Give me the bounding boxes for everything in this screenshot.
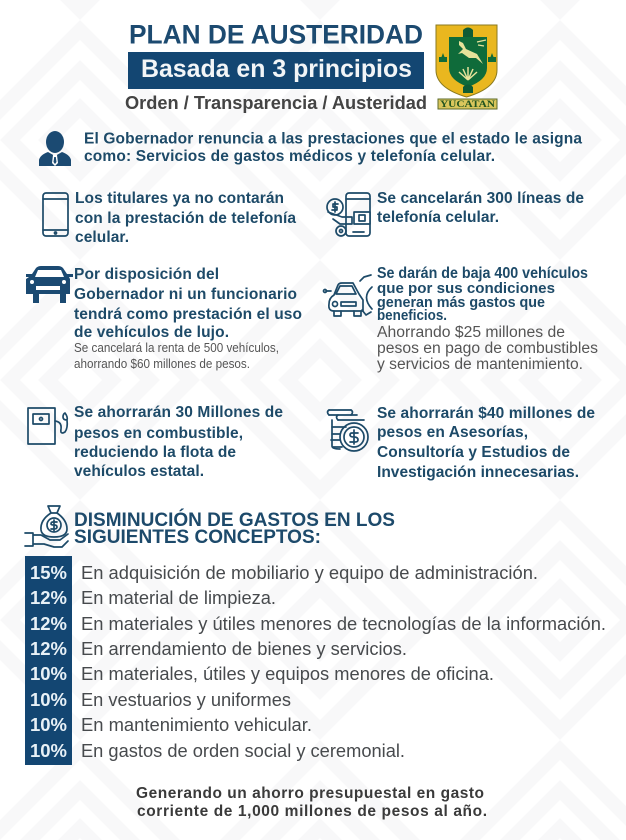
text: fuel savings: pesos en combustible,	[74, 425, 243, 442]
text: fuel savings: reduciendo la flota de	[74, 444, 236, 461]
text: titulares	[75, 190, 296, 246]
text: consultancy savings	[377, 405, 595, 481]
text: savings on fuel and maintenance	[377, 324, 598, 373]
row 4: 12%	[30, 638, 67, 659]
text: 400 vehicles: generan más gastos que	[377, 295, 545, 311]
row 2: En material de limpieza.	[81, 587, 276, 608]
text: rental cancellation	[74, 341, 279, 371]
icon: coins stack	[328, 410, 368, 451]
banner: Basada en 3 principios	[128, 52, 424, 89]
text: 400 vehicles	[377, 265, 598, 373]
row 5: 10%	[30, 663, 67, 684]
text: titulares: celular.	[75, 229, 129, 246]
icon: luxury vehicle	[26, 266, 73, 303]
section heading	[74, 507, 395, 548]
icon: phone with money	[327, 193, 370, 236]
title: PLAN DE AUSTERIDAD	[129, 20, 423, 50]
row 3: 12%	[30, 613, 67, 634]
text: rental cancellation: ahorrando $60 millones de pesos.	[74, 357, 250, 371]
text: governor renounces benefits: como: Servicios de gastos médicos y telefonía celular.	[84, 148, 495, 165]
text: titulares: Los titulares ya no contarán	[75, 190, 284, 207]
row 6: En vestuarios y uniformes	[81, 689, 291, 710]
text: 300 phone lines: Se cancelarán 300 líneas de	[377, 190, 584, 207]
text: 400 vehicles: beneficios.	[377, 308, 447, 324]
row 1: 15%	[30, 562, 67, 583]
text: consultancy savings: Investigación innecesarias.	[377, 464, 579, 481]
text: 300 phone lines	[377, 190, 584, 226]
text: no luxury vehicles: tendrá como prestación el uso	[74, 306, 302, 323]
row 7: En mantenimiento vehicular.	[81, 714, 312, 735]
text: rental cancellation: Se cancelará la renta de 500 vehículos,	[74, 341, 279, 355]
text: savings on fuel and maintenance: Ahorrando $25 millones de	[377, 324, 565, 341]
row 1: En adquisición de mobiliario y equipo de administración.	[81, 562, 538, 583]
row 2: 12%	[30, 587, 67, 608]
text: fuel savings: Se ahorrarán 30 Millones de	[74, 404, 283, 421]
subtitle: principles: Orden / Transparencia / Austeridad	[125, 93, 427, 113]
icon: mobile phone	[43, 193, 68, 236]
text: consultancy savings: Consultoría y Estudios de	[377, 444, 570, 461]
text: no luxury vehicles: de vehículos de lujo.	[74, 324, 229, 341]
row 7: 10%	[30, 714, 67, 735]
row 3: En materiales y útiles menores de tecnologías de la información.	[81, 613, 606, 634]
text: no luxury vehicles: Por disposición del	[74, 266, 219, 283]
text: titulares: con la prestación de telefonía	[75, 210, 296, 227]
section heading: SIGUIENTES CONCEPTOS:	[74, 526, 321, 548]
footer: total savings: corriente de 1,000 millones de pesos al año.	[137, 803, 487, 820]
text: savings on fuel and maintenance: pesos en pago de combustibles	[377, 340, 598, 357]
row 6: 10%	[30, 689, 67, 710]
text: consultancy savings: pesos en Asesorías,	[377, 424, 528, 441]
footer: total savings: Generando un ahorro presupuestal en gasto	[136, 785, 484, 802]
text: 400 vehicles: que por sus condiciones	[377, 281, 555, 297]
header: title block	[125, 20, 427, 113]
text: no luxury vehicles	[74, 266, 302, 371]
icon: governor in a suit	[39, 131, 71, 166]
row 8: En gastos de orden social y ceremonial.	[81, 740, 405, 761]
panel: percent column	[25, 556, 72, 765]
text: governor renounces benefits: El Gobernador renuncia a las prestaciones que el estado le asigna	[84, 130, 582, 148]
text: governor renounces benefits	[84, 130, 582, 165]
row 5: En materiales, útiles y equipos menores de oficina.	[81, 663, 494, 684]
percentage list	[25, 556, 606, 765]
row 4: En arrendamiento de bienes y servicios.	[81, 638, 407, 659]
icon: money bag in hand	[25, 506, 68, 547]
icon: car with gear	[324, 275, 372, 316]
icon: Yucatan coat of arms	[436, 25, 497, 110]
text: fuel savings	[74, 404, 283, 480]
text: savings on fuel and maintenance: y servicios de mantenimiento.	[377, 356, 583, 373]
footer: total savings	[136, 785, 487, 820]
section heading: DISMINUCIÓN DE GASTOS EN LOS	[74, 507, 395, 531]
icon: fuel pump	[28, 408, 67, 444]
text: fuel savings: vehículos estatal.	[74, 463, 204, 480]
text: 400 vehicles: Se darán de baja 400 vehículos	[377, 265, 588, 282]
icon: Yucatan coat of arms: YUCATAN	[440, 100, 495, 110]
text: 300 phone lines: telefonía celular.	[377, 209, 499, 226]
banner: Basada en 3 principios: Basada en 3 principios	[141, 55, 412, 83]
text: consultancy savings: Se ahorrarán $40 millones de	[377, 405, 595, 422]
row 8: 10%	[30, 740, 67, 761]
text: no luxury vehicles: Gobernador ni un funcionario	[74, 286, 297, 303]
